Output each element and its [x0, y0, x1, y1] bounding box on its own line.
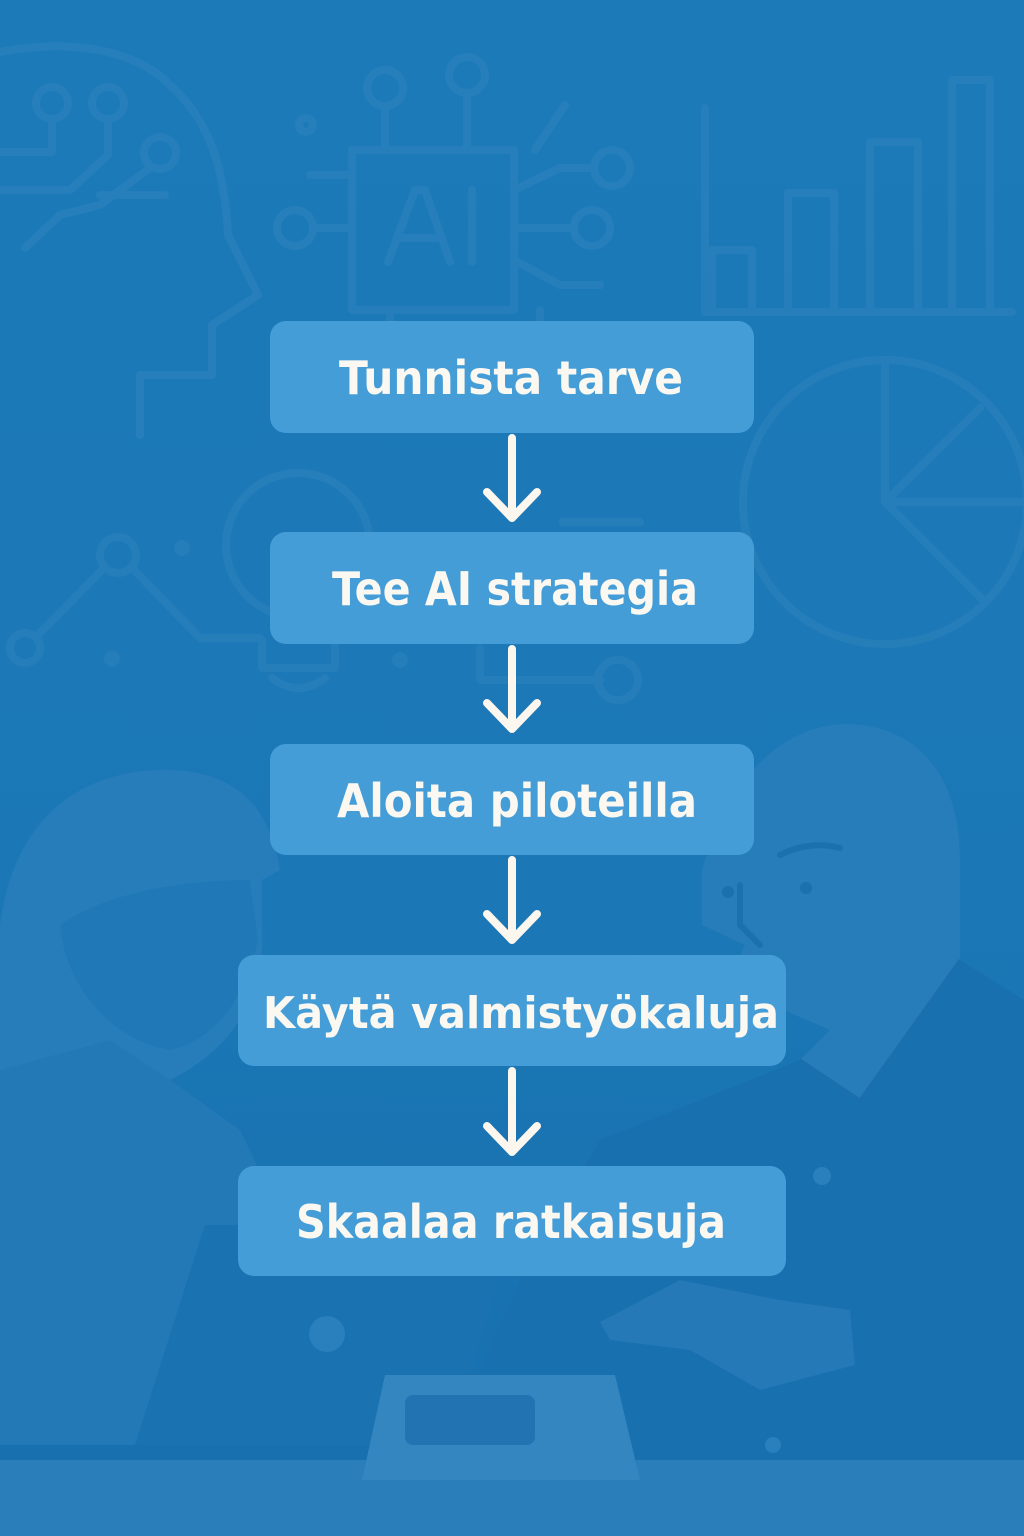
step 3: Aloita piloteilla [270, 744, 754, 855]
arrow 4 [487, 1071, 537, 1152]
background icon: AI chip [277, 57, 630, 330]
step 2: Tee AI strategia: Tee AI strategia [332, 562, 698, 616]
step 1: Tunnista tarve [270, 321, 754, 433]
background figure: woman [0, 770, 285, 1445]
background device: laptop and table [0, 1225, 1024, 1536]
step 5: Skaalaa ratkaisuja [238, 1166, 786, 1276]
step 4: Käytä valmistyökaluja: Käytä valmistyökaluja [263, 988, 779, 1039]
arrow 3 [487, 860, 537, 940]
step 2: Tee AI strategia [270, 532, 754, 644]
background icon: line chart and bulb [10, 473, 640, 700]
step 5: Skaalaa ratkaisuja: Skaalaa ratkaisuja [296, 1195, 726, 1249]
background icon: head with circuits [0, 46, 258, 435]
step 4: Käytä valmistyökaluja [238, 955, 786, 1066]
arrow 2 [487, 649, 537, 729]
background icon: pie chart [743, 360, 1024, 644]
background icon: bar chart [705, 80, 1012, 312]
arrow 1 [487, 438, 537, 518]
background figure: man [440, 724, 1024, 1460]
step 3: Aloita piloteilla: Aloita piloteilla [337, 774, 697, 828]
step 1: Tunnista tarve: Tunnista tarve [339, 351, 683, 405]
